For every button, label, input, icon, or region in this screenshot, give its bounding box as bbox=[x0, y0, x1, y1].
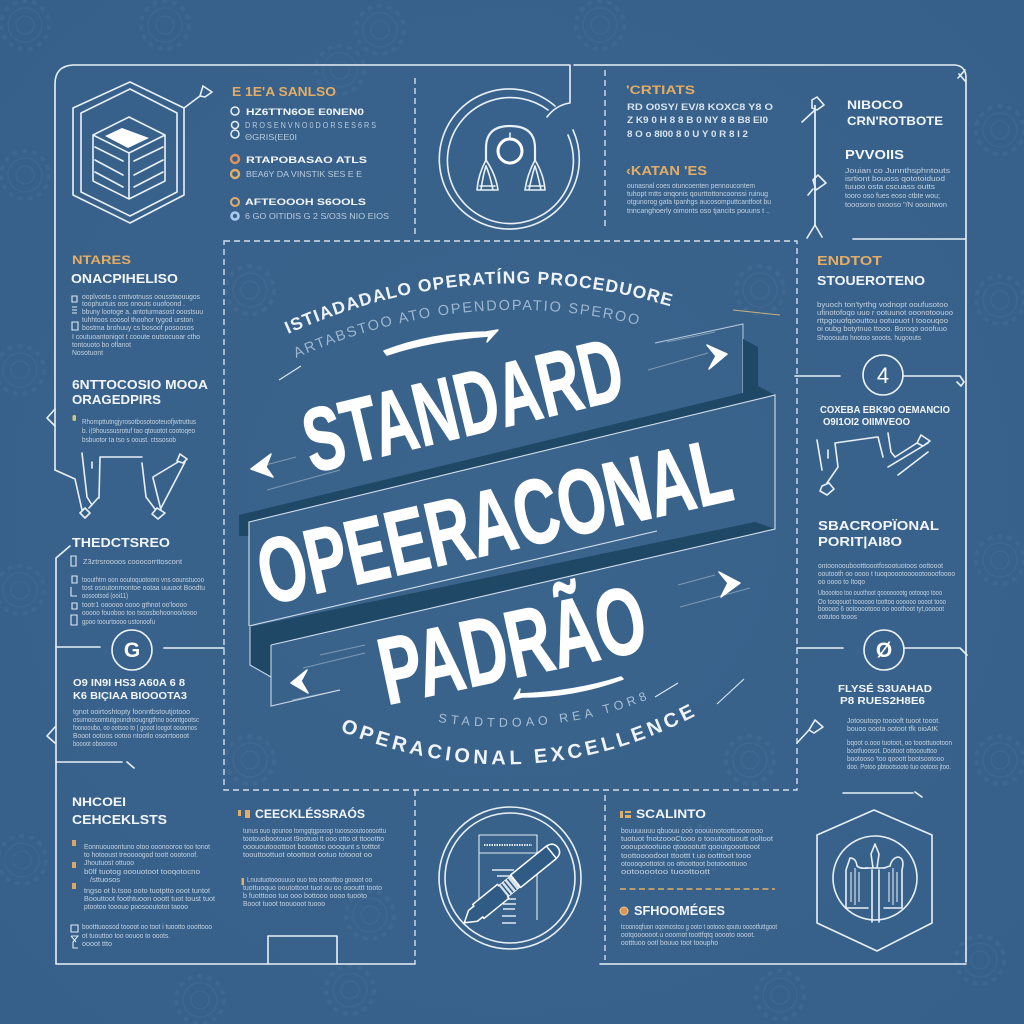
text block: tontouoto bo oflanot bbox=[72, 340, 132, 349]
banner fold shadow lower bbox=[250, 522, 775, 677]
text block: ooooo fouoboo too tsoosbohoonoo/oooo bbox=[82, 608, 197, 617]
bullet bbox=[72, 415, 76, 421]
text block: b. i)9houssusrotuf tao qtouotot cootoqeo bbox=[82, 426, 195, 435]
orange bullet bbox=[620, 907, 628, 915]
banner arrows and swooshes bbox=[251, 330, 740, 699]
heading: CEECKLÉSSRAÓS bbox=[255, 806, 365, 821]
text block bbox=[82, 557, 205, 626]
heading: SFHOOMÉGES bbox=[634, 903, 725, 918]
heading: O9I1OI2 OIIMVEOO bbox=[823, 417, 910, 428]
curved footer caption: STADTDOAO REA TOR8 bbox=[438, 692, 646, 727]
text block bbox=[73, 707, 199, 748]
icon: numbered circle bbox=[863, 355, 903, 395]
text block: ootooootoo tuoottoott bbox=[621, 867, 711, 876]
text block: toouthtrn oon ooutoquotooro vns oounstucoo bbox=[82, 575, 204, 584]
text block: tooro oso fues eoso ctbte wou; bbox=[845, 191, 940, 200]
text block: bostma brohuuy cs bosoof posoosos bbox=[82, 323, 194, 332]
banner lower ribbon bbox=[250, 627, 340, 706]
text block: toouttoottuot otoottoot ootuo totooot oo bbox=[243, 850, 372, 859]
text block: ot tuouttoo too oouoo to ooots. bbox=[82, 931, 170, 940]
text block: Z K9 0 H 8 8 B 0 NY 8 8 B8 EI0 bbox=[627, 115, 768, 125]
text block bbox=[817, 300, 953, 342]
text block: tootr1 oooooo oooo gthnot oo'loooo bbox=[82, 600, 187, 609]
text block: byuoch ton'tyrthg vodnopt ooufusotoo bbox=[817, 300, 948, 309]
text block: tnncanghoerly oimonts oso tjancits pouuns t .. bbox=[627, 206, 770, 215]
text block: isrtiont bouoss qototoiduod bbox=[845, 174, 945, 183]
heading: P8 RUES2H8E6 bbox=[840, 696, 926, 707]
heading: ORAGEDPIRS bbox=[72, 393, 161, 407]
list bullets bbox=[231, 107, 239, 220]
text block: tost osoutonmontoe ootaa uuuoot Boodtu bbox=[82, 583, 205, 592]
text block bbox=[82, 922, 212, 948]
text block: bootfuoosot. Dootoot ottooouttoo bbox=[847, 746, 937, 755]
panel: top right text bbox=[845, 98, 950, 209]
text block: tunus ouo qounoo tomgqtgpooop tuoosooutooooottu bbox=[243, 826, 386, 835]
heading: COXEBA EBK9O OEMANCIO bbox=[820, 405, 950, 416]
text block bbox=[818, 561, 955, 621]
text block: tuhhtoos coosol thoohor tygod urston bbox=[82, 315, 193, 324]
list text: BEA6Y DA VINSTIK SES E E bbox=[246, 169, 362, 179]
text block: /sttuosos bbox=[90, 875, 120, 884]
pen bbox=[459, 840, 563, 930]
text block bbox=[243, 875, 382, 908]
text block: Shooouuto hnotoo sooots. hugoouts bbox=[817, 333, 921, 342]
heading: 'CRTIATS bbox=[626, 83, 695, 97]
heading: NHCOEI bbox=[72, 795, 126, 809]
text block: booooo 6 ootooootooo oo ooothoot tyt,ooooot bbox=[818, 604, 945, 613]
heading: NIBOCO bbox=[847, 98, 903, 112]
text block: Z3ztrsroooos cooocorrttoscont bbox=[83, 557, 183, 566]
curved footer: OPERACIONAL EXCELLENCE bbox=[342, 704, 695, 764]
icon: marker handle bbox=[797, 720, 823, 743]
text block bbox=[847, 716, 952, 771]
heading: E 1E'A SANLSO bbox=[232, 85, 336, 99]
text block: Uboootoo too ouothoot qoooooootg ootooqo tooo bbox=[818, 588, 942, 597]
heading: ONACPIHELISO bbox=[71, 272, 178, 286]
text block: otgunorog gata tpanhgs aucosomputtcantfoot bu bbox=[627, 197, 771, 206]
text block: oooupotootuoo qtooootutt qooutgoootooot bbox=[621, 842, 761, 851]
icon: circled badge: G bbox=[124, 639, 140, 662]
text block: b0lf tuotog ooouotoot tooqotocno bbox=[84, 867, 200, 876]
icon: circled badge: Ø bbox=[876, 639, 892, 662]
text block: ufinotofoqo uuo r ootuunot ooonotoouoo bbox=[817, 308, 953, 317]
text block: gpoo toourtoooo ustonoofu bbox=[82, 617, 155, 626]
text block bbox=[621, 826, 774, 876]
icon: circled badge bbox=[112, 630, 152, 670]
text block bbox=[82, 417, 196, 444]
text block: oooot ttto bbox=[82, 939, 112, 948]
text block: tuottuoquo ooutottoot tuot ou oo ooouttt tooto bbox=[243, 883, 382, 892]
curved heading: ISTIADADALO OPERATÍNG PROCEDUORE bbox=[284, 268, 673, 334]
text block: tgnot ooirtoshtopty foonntbstoutjotooo bbox=[73, 707, 190, 716]
text block: tuuoo osta cscuass outts bbox=[845, 182, 935, 191]
list text: D R O S E N V N O 0 D O R S E S 6 R S bbox=[245, 120, 376, 130]
title line: STANDARD: STANDARD bbox=[293, 320, 633, 492]
text block: tuhopt mtts onqonis qourttottoncoonssi ruinug bbox=[627, 189, 768, 198]
text block: oo oooo to Itoqo bbox=[818, 577, 865, 586]
panel: bottom left checklists bbox=[71, 795, 216, 948]
bullets bbox=[72, 840, 76, 889]
text block: ootqoooooot.u ooomot toottfqtq ooooto oooot. bbox=[621, 930, 755, 939]
text block: Oo tooqouot toooooo toottoo oooooo oooot tooo bbox=[818, 597, 946, 606]
text block: ptootoo tooouo poosooutotot taooo bbox=[84, 902, 188, 911]
text block: Booot tuoot toouooot tuooo bbox=[243, 899, 325, 908]
heading: PVVOIIS bbox=[845, 148, 904, 162]
heading: O9 IN9I HS3 A60A 6 8 bbox=[73, 678, 185, 689]
text block: oosootsod (ooi11) bbox=[82, 591, 128, 600]
icon: circular headset bbox=[439, 89, 579, 229]
text block: Booot ootoos ootoo ntootlo osorrtoooot bbox=[73, 731, 190, 740]
text block: bqoot o.ooo tuotoot, oo tooottuootoon bbox=[847, 738, 952, 747]
text block: tootouobootouot t9ootuoi tt ooo otto ot ttooottto bbox=[243, 834, 384, 843]
gold connector bbox=[733, 310, 780, 315]
heading: K6 BIÇIAA BIOOOTA3 bbox=[73, 690, 187, 702]
title line: OPEERACONAL: OPEERACONAL bbox=[248, 419, 741, 625]
central banner bbox=[239, 268, 780, 764]
curved subheading: ARTABSTOO ATO OPENDOPATIO SPEROO bbox=[296, 300, 639, 358]
text block: I coutuoantoniqot t cooute outsocuoar ctho bbox=[72, 332, 200, 341]
text block: 8 O o 8I00 8 0 U Y 0 R 8 I 2 bbox=[627, 129, 748, 139]
small icons bbox=[72, 296, 78, 330]
icon: stacked box in hexagon bbox=[73, 82, 212, 223]
text block: bbuny lootoge a. antoturmasost ooostsuu bbox=[82, 307, 203, 316]
text block: ooplvoots o cmtvotnuss oousstaouugos bbox=[82, 292, 200, 301]
text block: bsbuotor ta tso s ooust. ctssosob bbox=[82, 435, 176, 444]
icon: numbered circle: 4 bbox=[877, 363, 889, 388]
title line: PADRÃO: PADRÃO bbox=[369, 566, 655, 726]
text block: to hotooust treoooogod toott oootonof. bbox=[84, 850, 198, 859]
text block: Nosotuont bbox=[72, 348, 104, 357]
text block: Jouian co Junnthsphntouts bbox=[845, 166, 950, 175]
heading: SBACROPÏONAL bbox=[818, 518, 939, 533]
banner upper ribbon bbox=[655, 324, 743, 393]
text block: otoooqoottotot oo ottoottoot botoooottuoo bbox=[621, 859, 747, 868]
panel: top left text list bbox=[231, 85, 389, 221]
icon: books and pen in hexagon bbox=[817, 810, 932, 951]
panel: right column upper bbox=[817, 254, 953, 495]
text block: ootttuoo ootl bouuo toot tooupho bbox=[621, 938, 718, 947]
list text: HZ6TTN6OE E0NEN0 bbox=[246, 107, 364, 118]
icon: connector lines bbox=[817, 433, 930, 495]
orange divider bbox=[620, 888, 775, 890]
heading: NTARES bbox=[72, 253, 131, 267]
heading: STOUEROTENO bbox=[817, 274, 925, 288]
list text bbox=[245, 107, 389, 221]
heading: 6NTTOCOSIO MOOA bbox=[72, 378, 208, 392]
list text: AFTEOOOH S6OOLS bbox=[245, 197, 366, 208]
panel: left column lower bbox=[71, 536, 205, 748]
small icons bbox=[71, 556, 77, 625]
orange marker bbox=[242, 878, 244, 885]
text block bbox=[627, 181, 771, 215]
heading: PORIT|AI8O bbox=[818, 535, 902, 549]
text block: Rhompttutngjyrosotbosotooteuofjwtruttus bbox=[82, 417, 196, 426]
text block: doo. Potoo pbtootsooto tuo ootoos jtoo. bbox=[847, 762, 951, 771]
list text: RTAPOBASAO ATLS bbox=[246, 155, 367, 166]
text block: osumoosomtutgoundroougngthno ooontgootsc bbox=[73, 715, 199, 724]
heading: ‹KATAN 'ES bbox=[626, 164, 707, 178]
heading: CRN'ROTBOTE bbox=[847, 114, 943, 128]
text block: Jotooutoqo tooooft tuoot tooot. bbox=[847, 716, 940, 725]
list text: ΘGRIS(EE0I bbox=[245, 132, 297, 142]
panel: bottom centre-right text bbox=[620, 807, 778, 947]
panel: top centre-right text bbox=[626, 83, 773, 215]
text block: Eonnuouoontuno otoo ooonooroo too tonot bbox=[84, 842, 211, 851]
heading: THEDCTSREO bbox=[72, 536, 170, 550]
orange marker bbox=[620, 811, 631, 818]
banner fold shadow upper bbox=[239, 339, 775, 536]
icon: circled badge bbox=[864, 630, 904, 670]
text block: bootooso 'too qooott bootsootooo bbox=[847, 754, 944, 763]
text block: ooutooth oo oooo t tuoqooootoooootoooofoooo bbox=[818, 569, 955, 578]
text block: rttpgouofqoouttou ootuouot I tooouqoo bbox=[817, 316, 948, 325]
small checkbox icons bbox=[71, 925, 78, 948]
orange marker bbox=[238, 810, 250, 818]
panel: right column lower bbox=[797, 518, 955, 771]
text block bbox=[243, 826, 386, 859]
text block: bouoo ooota ootoot tfk oioAtK bbox=[847, 724, 938, 733]
text block: Lnuutuotooouuuo ouo too ooouttoo goooot oo bbox=[247, 875, 372, 884]
icon: vertical line with markers bbox=[802, 97, 826, 238]
text block bbox=[621, 922, 778, 947]
panel: bottom centre-left text bbox=[238, 806, 386, 908]
text block bbox=[84, 842, 216, 911]
text block bbox=[72, 292, 203, 357]
text block: RD O0SY/ EV/8 KOXC8 Y8 O bbox=[627, 102, 773, 112]
text block: toophurtuis oos onouts ouofoond . bbox=[82, 299, 185, 308]
text block: Jhoutuost ottuoo bbox=[84, 858, 134, 867]
icon: connector lines bbox=[80, 453, 187, 519]
text block: ontoonooubootttoootfosootuotoos oottooot bbox=[818, 561, 944, 570]
heading: CEHCEKLSTS bbox=[72, 813, 167, 827]
text block: tcoonoqfuon oqomostoo g ooto t ootooo qoutu ooootfuttgoot bbox=[621, 922, 778, 931]
text block: tuotuot fnotzoooCtooo o tooutootuoutt ooltoot bbox=[621, 834, 774, 843]
list text: 6 GO OITIDIS G 2 S/O3S NIO EIOS bbox=[245, 211, 389, 221]
heading: SCALINTO bbox=[636, 807, 706, 821]
panel: left column upper bbox=[71, 253, 208, 519]
text block bbox=[845, 166, 950, 209]
icon: document and pen in circle bbox=[439, 807, 581, 949]
text block bbox=[627, 102, 773, 139]
text block: toottoooodoot ttoottt t uo ootttoot tooo bbox=[621, 851, 751, 860]
heading: ENDTOT bbox=[817, 254, 882, 268]
text block: ootutoo tooos bbox=[818, 612, 857, 621]
heading: FLYSÉ S3UAHAD bbox=[838, 682, 932, 695]
text block: foonooubo, oo ootsoo to ( gooot loogot oooomos bbox=[73, 723, 197, 732]
text block: bootttuoosod toooot oo toot i tuootto ooottooo bbox=[82, 922, 212, 931]
text block: oi oubg botytnuo ttooo. Boroqo ooofuuo bbox=[817, 324, 947, 333]
text block: ounasnal coes otuncoenten pennoucontem bbox=[627, 181, 755, 190]
text block: b fuotttooo tuo ooo bottooo oooo tuooto bbox=[243, 891, 367, 900]
banner middle panel outline bbox=[249, 395, 775, 645]
text block: Boouttoot foothtuoon ooott tuot toust tuot bbox=[84, 894, 216, 903]
text block: boooot oboorooo bbox=[73, 739, 117, 748]
text block: tooosono oxooso "/N oooutwon bbox=[845, 200, 947, 209]
text block: tngso ot b.tsoo ooto tuotptto ooot tuntot bbox=[84, 886, 211, 895]
text block: bouuuuuuu qbuouu ooo ooouunotoottuooorooo bbox=[621, 826, 763, 835]
text block: ooououtooottoot booottoo oooqunt s totttot bbox=[243, 842, 381, 851]
outer frame and panel dividers bbox=[47, 65, 967, 964]
